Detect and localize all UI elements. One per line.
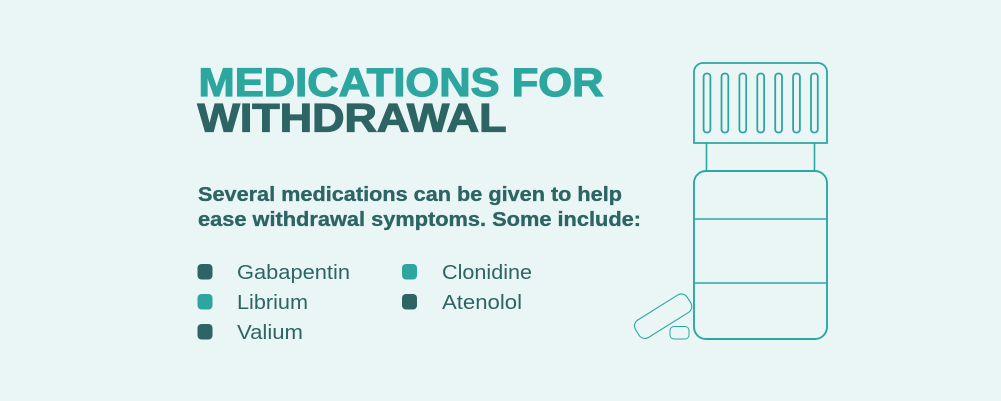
icon: small pill — [670, 326, 689, 339]
item: Gabapentin: Gabapentin — [237, 262, 350, 284]
bottle cap — [694, 63, 827, 143]
intro text: ease withdrawal symptoms. Some include: — [198, 208, 641, 231]
item: Valium — [198, 322, 303, 344]
icon: long pill — [632, 291, 694, 341]
item: Atenolol: Atenolol — [442, 292, 522, 314]
item: Librium: Librium — [237, 292, 308, 314]
title — [198, 61, 604, 140]
label lines — [694, 219, 827, 283]
title: WITHDRAWAL — [198, 96, 506, 140]
medication list — [198, 262, 532, 344]
item: Clonidine: Clonidine — [442, 262, 532, 284]
title: MEDICATIONS FOR — [198, 61, 604, 105]
intro text — [198, 183, 641, 231]
intro text: Several medications can be given to help — [198, 183, 622, 206]
item: Valium: Valium — [237, 322, 303, 344]
icon: pill bottle — [632, 63, 827, 341]
item: Gabapentin — [198, 262, 350, 284]
bottle neck — [706, 143, 814, 171]
item: Atenolol — [402, 292, 522, 314]
bottle body — [694, 171, 827, 339]
item: Librium — [198, 292, 308, 314]
item: Clonidine — [402, 262, 532, 284]
